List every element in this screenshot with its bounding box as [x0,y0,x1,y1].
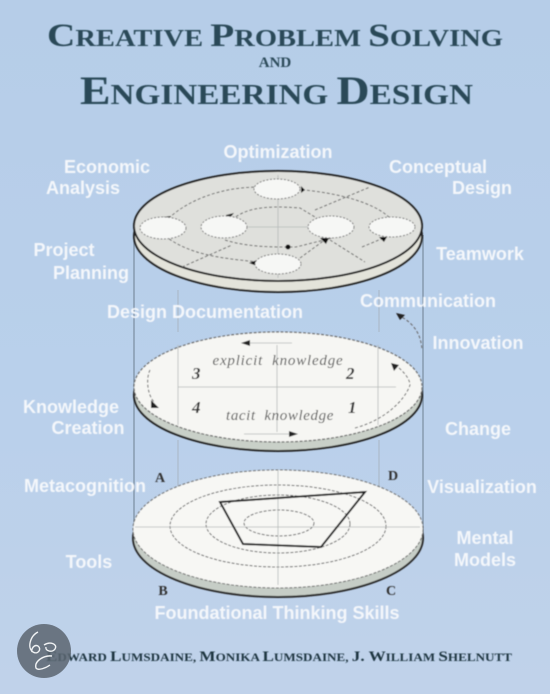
label: explicit knowledge: explicit knowledge [212,353,344,369]
disk face [134,171,422,281]
corner letters [155,469,398,599]
quadrant numbers: 2 [345,364,355,383]
quadrant numbers: 4 [191,398,200,417]
white topic labels: Analysis [46,178,120,198]
corner letters: C [386,584,396,599]
disk face [133,470,423,588]
white topic labels: Innovation [432,333,524,353]
label: tacit knowledge: tacit knowledge [226,408,334,424]
corner letters: D [388,469,398,484]
white topic labels: Visualization [427,477,537,497]
disk base [134,339,422,451]
white topic labels: Foundational Thinking Skills [154,603,400,623]
corner letters: B [158,584,168,599]
disk: middle [134,313,422,451]
white topic labels: Creation [51,418,125,438]
title: AND [259,55,291,71]
arrow: to communication [396,313,422,350]
quadrant lines [178,345,396,432]
white topic labels: Change [445,419,511,439]
white topic labels: Mental [456,528,514,548]
corner letters: A [155,471,166,486]
white topic labels: Design Documentation [107,302,303,322]
white topic labels: Project [33,240,95,260]
white topic labels: Design [452,178,512,198]
quadrilateral [220,492,365,547]
white topic labels: Metacognition [24,476,146,496]
disk face [134,332,422,442]
white topic labels: Optimization [224,142,332,162]
process paths [165,175,395,278]
title: CREATIVE PROBLEM SOLVING [47,18,503,54]
white topic labels: Models [454,550,516,570]
disk base [134,180,422,292]
badge script mark [30,632,56,669]
white topic labels [23,142,537,623]
quadrant numbers: 1 [348,398,356,417]
white topic labels: Conceptual [389,157,487,177]
authors: EDWARD LUMSDAINE, MONIKA LUMSDAINE, J. W ILLIAM SHELNUTT [46,649,512,665]
quadrant numbers [191,364,356,417]
disk: top [134,171,422,292]
white topic labels: Communication [360,291,496,311]
white topic labels: Teamwork [436,244,525,264]
nodes [140,179,415,274]
arrowheads [162,186,387,266]
title: ENGINEERING DESIGN [80,68,473,113]
white topic labels: Planning [53,263,129,283]
white topic labels: Knowledge [23,397,119,417]
disk base [133,479,423,597]
connecting cylinder lines [134,235,423,540]
white topic labels: Tools [66,552,112,572]
badge: watermark [17,624,71,678]
cycle arrows [148,340,410,437]
concentric rings [170,485,386,567]
quadrant numbers: 3 [191,364,201,383]
title [47,18,503,113]
disk: bottom [133,469,423,599]
white topic labels: Economic [64,157,150,177]
